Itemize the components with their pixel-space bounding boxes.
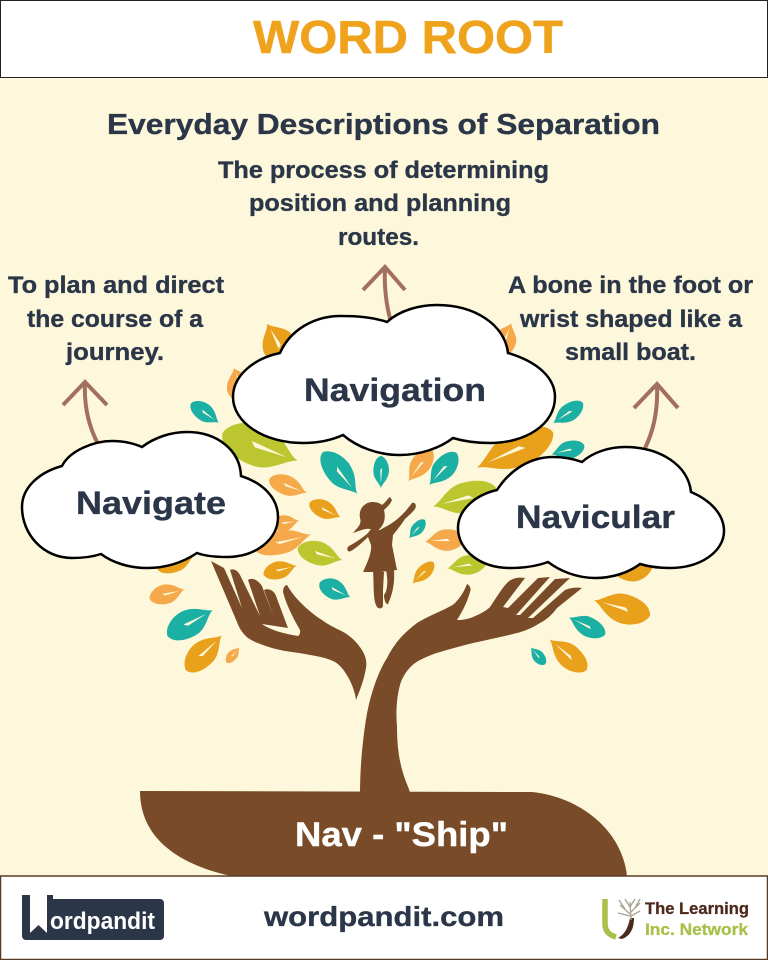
title: WORD ROOT [253,11,563,63]
arrow: navigation [363,267,405,322]
learning inc network logo [605,899,749,939]
definition: navigation: The process of determining [218,157,549,184]
root label: Nav - "Ship" [295,816,508,854]
subtitle: Everyday Descriptions of Separation [107,109,660,141]
trunk and right hand [360,577,582,795]
footer [0,876,768,960]
definition: navigation: position and planning [249,190,511,217]
learning inc network logo: The Learning [645,899,749,918]
definition: navigation [218,157,549,251]
cloud: navicular [458,447,724,578]
header banner [0,0,768,78]
website address: wordpandit.com [263,901,504,932]
ground mound [140,791,627,876]
cloud: navigation: Navigation [304,372,486,408]
definition: navicular: small boat. [565,339,696,366]
definition: navigate [8,272,224,366]
left hand [211,561,366,700]
wordpandit logo [22,895,164,940]
arrow: navigate [63,382,107,444]
girl silhouette [347,497,416,608]
cloud: navigate: Navigate [76,485,226,521]
definition: navigate: journey. [65,339,164,366]
arrow: navicular [634,384,678,448]
definition: navigate: To plan and direct [8,272,224,299]
tree foliage leaves [147,316,656,680]
definition: navicular [508,272,753,366]
definition: navicular: A bone in the foot or [508,272,753,299]
cloud: navicular: Navicular [516,499,675,535]
wordpandit logo: ordpandit [50,908,155,935]
definition: navigate: the course of a [27,306,204,333]
cloud: navigate [22,432,278,568]
cloud: navigation [233,305,555,455]
definition: navicular: wrist shaped like a [519,306,743,333]
definition: navigation: routes. [338,224,419,251]
learning inc network logo: Inc. Network [645,920,749,939]
